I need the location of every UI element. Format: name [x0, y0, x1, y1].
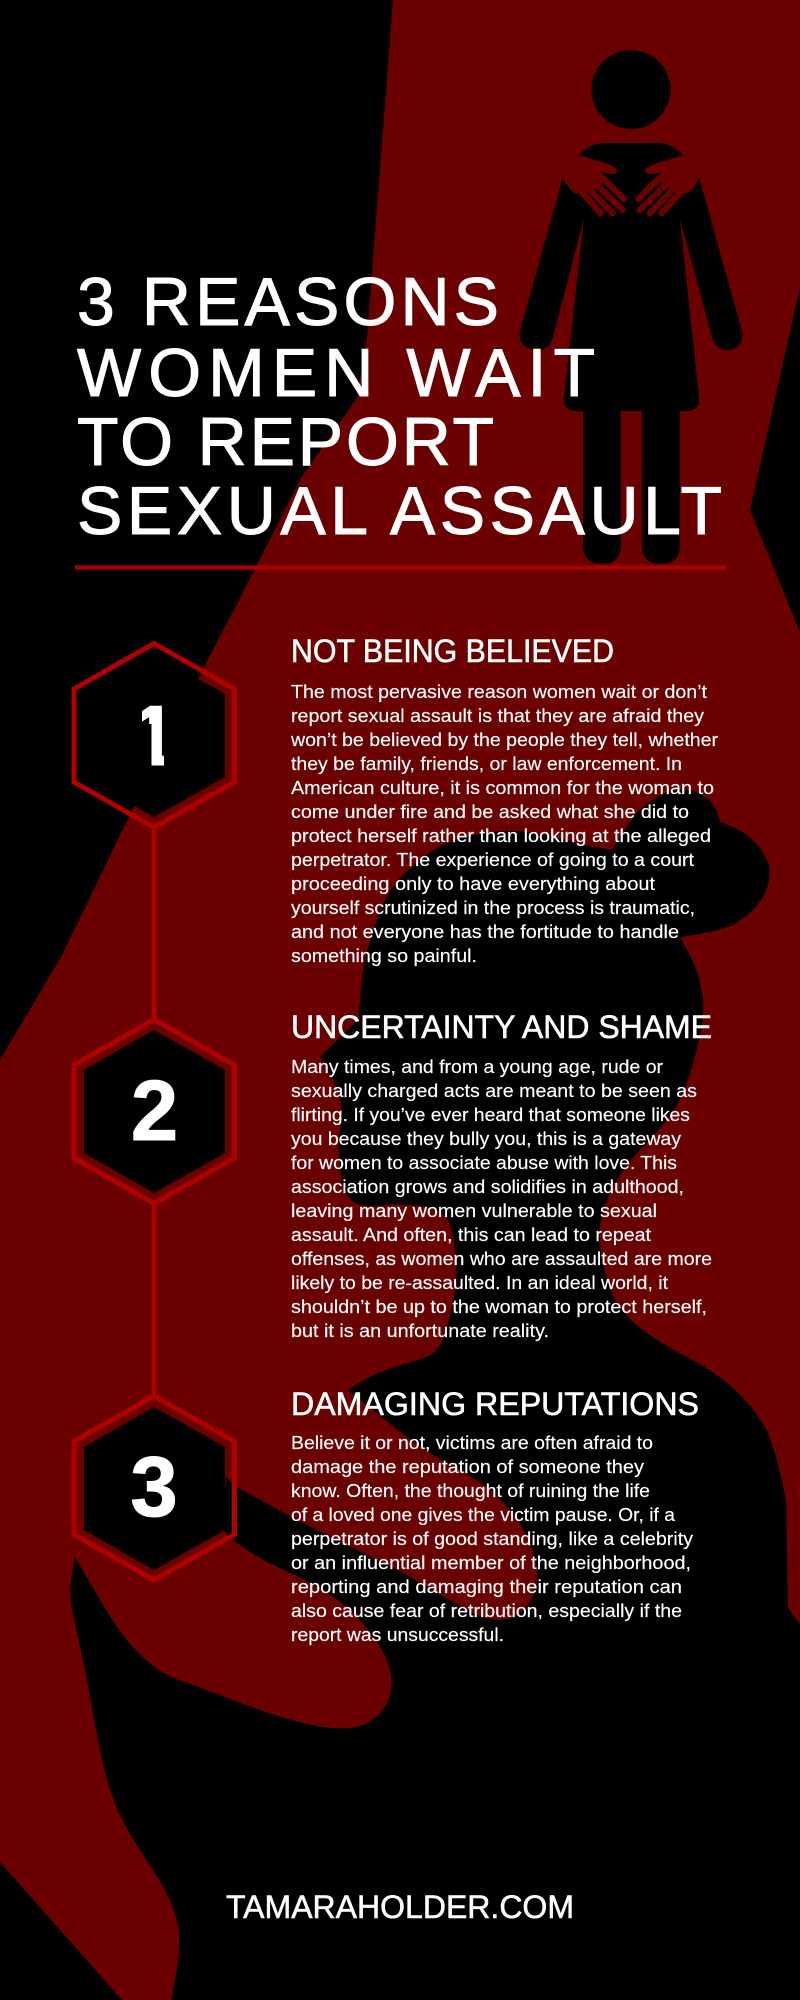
- footer website: TAMARAHOLDER.COM: [226, 1889, 574, 1925]
- step 3 hexagon: [74, 1396, 234, 1580]
- title: TO REPORT: [77, 404, 494, 480]
- step 1 body text: they be family, friends, or law enforcement. In: [291, 754, 682, 774]
- step 3 body text: of a loved one gives the victim pause. Or, if a: [291, 1505, 676, 1525]
- icon: woman figure with hands on shoulders: [520, 50, 742, 564]
- step 1 body text: won’t be believed by the people they tell, whether: [290, 730, 718, 750]
- step 3 body text: reporting and damaging their reputation can: [291, 1577, 682, 1597]
- title: 3 REASONS: [77, 264, 499, 340]
- step 1 heading: NOT BEING BELIEVED: [291, 633, 614, 669]
- step 1 body text: protect herself rather than looking at the alleged: [291, 826, 711, 846]
- step 2 body text: for women to associate abuse with love. This: [291, 1153, 677, 1173]
- step 2 heading: UNCERTAINTY AND SHAME: [291, 1009, 712, 1045]
- step 2 body text: offenses, as women who are assaulted are more: [291, 1249, 712, 1269]
- step 2 body text: [291, 1057, 712, 1341]
- step 2 body text: flirting. If you’ve ever heard that someone likes: [291, 1105, 690, 1125]
- title underline: [75, 566, 726, 570]
- step 2 body text: shouldn’t be up to the woman to protect herself,: [291, 1297, 707, 1317]
- step 2 body text: likely to be re-assaulted. In an ideal world, it: [291, 1273, 668, 1293]
- step 2 body text: leaving many women vulnerable to sexual: [291, 1201, 657, 1221]
- step 1 body text: perpetrator. The experience of going to a court: [291, 850, 694, 870]
- number 2: 2: [131, 1064, 178, 1159]
- timeline connector: [152, 825, 156, 1397]
- step 2 body text: but it is an unfortunate reality.: [291, 1321, 549, 1341]
- step 2 body text: association grows and solidifies in adulthood,: [291, 1177, 684, 1197]
- step 3 body text: perpetrator is of good standing, like a celebrity: [291, 1529, 693, 1549]
- step 2 body text: sexually charged acts are meant to be seen as: [291, 1081, 697, 1101]
- step 1 body text: report sexual assault is that they are afraid they: [291, 706, 704, 726]
- step 1 body text: The most pervasive reason women wait or don’t: [291, 682, 707, 702]
- step 3 body text: Believe it or not, victims are often afraid to: [291, 1433, 653, 1453]
- step 3 body text: or an influential member of the neighborhood,: [291, 1553, 691, 1573]
- step 3 body text: know. Often, the thought of ruining the life: [291, 1481, 650, 1501]
- step 3 heading: DAMAGING REPUTATIONS: [291, 1386, 699, 1422]
- step 2 body text: you because they bully you, this is a gateway: [291, 1129, 681, 1149]
- number 3: 3: [130, 1440, 178, 1535]
- number 1: 1: [130, 689, 177, 784]
- title: [77, 264, 722, 549]
- step 3 body text: [291, 1433, 693, 1645]
- step 2 body text: assault. And often, this can lead to repeat: [291, 1225, 651, 1245]
- step 1 body text: come under fire and be asked what she did to: [291, 802, 689, 822]
- step 1 body text: yourself scrutinized in the process is traumatic,: [291, 898, 695, 918]
- title: WOMEN WAIT: [77, 335, 595, 411]
- step 1 body text: and not everyone has the fortitude to handle: [291, 922, 679, 942]
- title: SEXUAL ASSAULT: [77, 473, 722, 549]
- step 1 body text: proceeding only to have everything about: [291, 874, 655, 894]
- step 3 body text: damage the reputation of someone they: [291, 1457, 644, 1477]
- step 1 body text: [290, 682, 718, 966]
- step 2 hexagon: [74, 1020, 234, 1204]
- step 1 body text: American culture, it is common for the woman to: [291, 778, 714, 798]
- step 1 body text: something so painful.: [291, 946, 477, 966]
- step 1 hexagon: [74, 644, 234, 828]
- step 3 body text: report was unsuccessful.: [291, 1625, 504, 1645]
- step 2 body text: Many times, and from a young age, rude or: [291, 1057, 663, 1077]
- step 3 body text: also cause fear of retribution, especially if the: [291, 1601, 682, 1621]
